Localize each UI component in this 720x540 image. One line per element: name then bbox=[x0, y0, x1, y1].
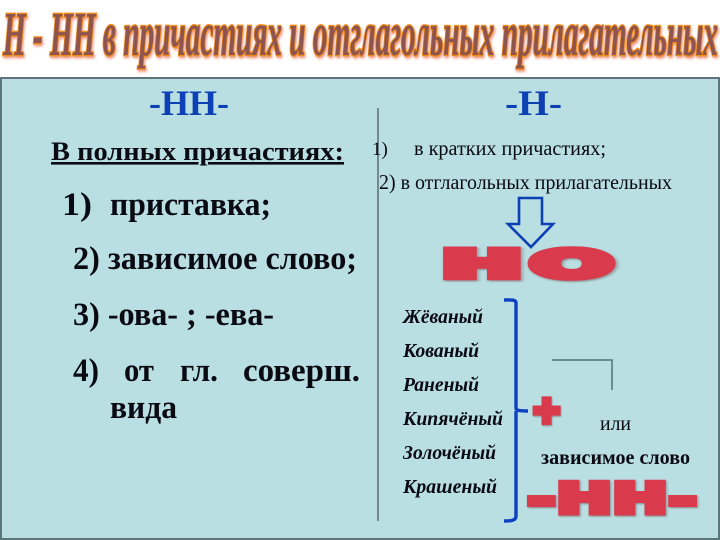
brace bbox=[504, 300, 528, 521]
word list bbox=[401, 307, 503, 498]
word list: Крашеный bbox=[402, 477, 497, 498]
list item 4: от bbox=[124, 353, 154, 389]
word list: Золочёный bbox=[402, 443, 496, 464]
word list: Жёваный bbox=[401, 307, 483, 328]
list item 2: 2) зависимое слово; bbox=[73, 241, 357, 277]
heading: -Н-: -Н- bbox=[505, 83, 562, 123]
big word: НО: НО bbox=[446, 242, 626, 284]
panel: right column -Н- bbox=[372, 83, 701, 522]
panel: left column -НН- bbox=[51, 83, 360, 426]
word list: Кипячёный bbox=[402, 409, 503, 430]
label: or: или bbox=[600, 413, 631, 435]
list item 1: приставка; bbox=[110, 187, 271, 223]
big word: -НН-: -НН- bbox=[530, 475, 701, 522]
list item 4: гл. bbox=[180, 353, 218, 389]
rule 1: 1) bbox=[372, 139, 388, 160]
rule 1: в кратких причастиях; bbox=[414, 136, 606, 160]
label: dependent word: зависимое слово bbox=[541, 445, 690, 469]
list item 1: 1) bbox=[62, 187, 92, 223]
subheading: full participles: В полных причастиях: bbox=[51, 137, 344, 166]
rule 2: 2) в отглагольных прилагательных bbox=[379, 170, 672, 194]
list item 4: 4) bbox=[73, 353, 99, 389]
list item 3: 3) -ова- ; -ева- bbox=[73, 297, 274, 333]
icon: down arrow bbox=[508, 198, 553, 247]
word list: Кованый bbox=[402, 341, 479, 362]
word list: Раненый bbox=[402, 375, 479, 396]
heading: -НН-: -НН- bbox=[149, 83, 229, 123]
list item 4 continuation: вида bbox=[110, 390, 177, 426]
divider bbox=[377, 108, 379, 521]
list item 4: соверш. bbox=[243, 353, 360, 389]
plus sign: + bbox=[533, 384, 560, 436]
corner line bbox=[552, 360, 612, 390]
list item 4 bbox=[73, 353, 360, 389]
